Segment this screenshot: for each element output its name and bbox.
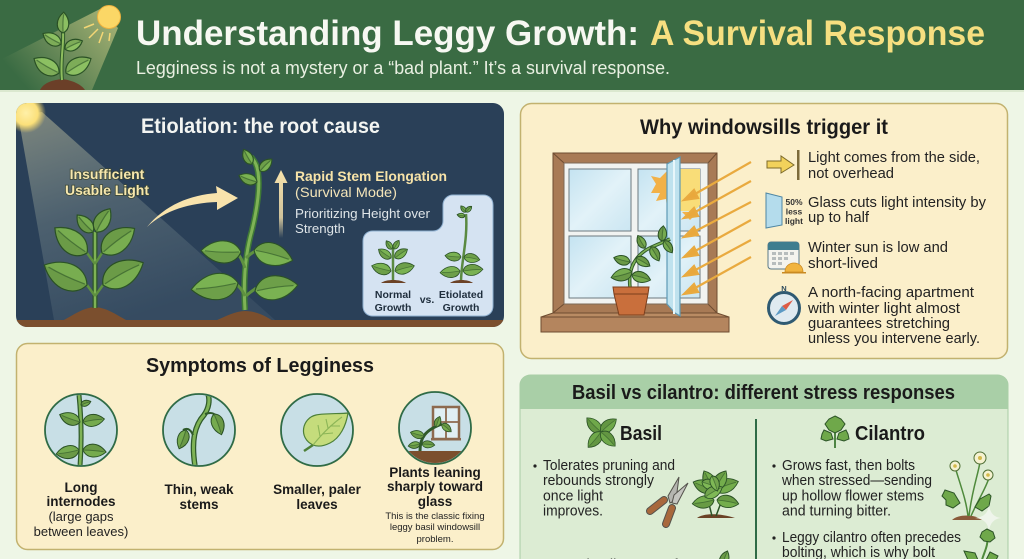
symptom: smaller leaves <box>273 394 362 512</box>
label: insufficient usable light <box>65 166 149 198</box>
inset labels: Growth <box>375 302 411 314</box>
light arrows <box>684 162 751 294</box>
symptom: plants leaning: glass <box>418 494 452 509</box>
symptom: plants leaning: problem. <box>417 534 453 545</box>
symptom: long internodes: internodes <box>46 494 116 509</box>
icon: cilantro leaf <box>821 416 849 448</box>
bullet: grows fast <box>772 458 932 520</box>
symptom: smaller leaves: Smaller, paler <box>273 482 362 497</box>
inset labels <box>375 289 483 314</box>
title: Understanding Leggy Growth: <box>136 14 639 53</box>
icon: plant in sunbeam <box>0 6 120 90</box>
mini plant: etiolated <box>440 205 483 283</box>
symptom: thin stems: Thin, weak <box>164 482 234 497</box>
bullet: tolerates pruning: Tolerates pruning and <box>543 458 675 474</box>
bullet: grows fast: up hollow flower stems <box>782 488 924 504</box>
potted plant <box>610 225 676 315</box>
plant: etiolated <box>190 147 299 310</box>
text: north facing: unless you intervene early. <box>808 330 980 347</box>
icon: basil bush <box>691 468 741 518</box>
column: cilantro <box>772 416 1001 559</box>
panel: etiolation <box>6 93 504 327</box>
icon: side arrow <box>767 150 800 180</box>
watermark star <box>975 505 1001 531</box>
panel: windowsills <box>520 104 1008 358</box>
text: winter sun: Winter sun is low and <box>808 239 948 256</box>
text: glass cuts light <box>808 194 986 226</box>
bullet: tolerates pruning: improves. <box>543 504 603 520</box>
label: insufficient usable light: Usable Light <box>65 182 149 198</box>
icon: bolting cilantro <box>942 452 993 520</box>
icon: calendar and low sun <box>768 242 806 274</box>
title: A Survival Response <box>650 14 985 53</box>
sun behind glass <box>680 169 700 211</box>
icon: glass 50%: 50% <box>785 197 803 207</box>
icon: cilantro sprig <box>964 529 998 559</box>
header banner <box>0 0 1024 92</box>
text: north facing: with winter light almost <box>807 300 961 317</box>
bullet: grows fast: and turning bitter. <box>782 504 891 520</box>
icon: basil leaves <box>583 414 620 451</box>
arrow: up <box>274 170 288 238</box>
text: light from side: not overhead <box>808 165 894 182</box>
illustration: window <box>541 153 751 332</box>
icon: pruning shears <box>650 477 688 524</box>
panel: symptoms <box>16 344 504 550</box>
bullet: leggy cilantro: Leggy cilantro often precedes <box>782 530 961 546</box>
text: north facing: guarantees stretching <box>808 315 950 332</box>
text: glass cuts light: up to half <box>808 209 870 226</box>
bullet: grows fast: when stressed—sending <box>781 473 932 489</box>
heading: Symptoms of Legginess <box>146 355 374 377</box>
text: rapid stem elongation: (Survival Mode) <box>295 184 397 200</box>
text: rapid stem elongation: Strength <box>295 221 345 236</box>
heading: Why windowsills trigger it <box>640 116 888 139</box>
mini plant: normal <box>370 239 416 283</box>
icon: glass 50%: light <box>785 216 803 226</box>
text: rapid stem elongation: Rapid Stem Elongation <box>295 168 447 184</box>
text: light from side: Light comes from the side, <box>808 149 980 166</box>
text: winter sun <box>808 239 948 272</box>
symptom: long internodes: between leaves) <box>34 524 128 539</box>
symptom: long internodes: (large gaps <box>48 509 114 524</box>
symptom: plants leaning: Plants leaning <box>389 465 481 480</box>
text: winter sun: short-lived <box>808 255 878 272</box>
text: glass cuts light: Glass cuts light intensity by <box>808 194 986 211</box>
text: light from side <box>808 149 980 182</box>
bullet: leggy cilantro <box>772 530 961 559</box>
heading: Etiolation: the root cause <box>141 115 380 138</box>
inset: normal vs etiolated <box>363 195 493 316</box>
symptom: plants leaning: sharply toward <box>387 479 483 494</box>
icon: small plant tip <box>718 549 731 559</box>
bullet: tolerates pruning: once light <box>543 488 603 504</box>
symptom: plants leaning <box>385 392 485 545</box>
symptom: plants leaning: leggy basil windowsill <box>390 522 480 533</box>
arrow: curved <box>147 186 238 227</box>
icon: glass 50% <box>766 193 803 228</box>
bullet: tolerates pruning <box>533 458 675 520</box>
panel: basil vs cilantro <box>520 375 1008 559</box>
symptom: smaller leaves: leaves <box>296 497 338 512</box>
light beam <box>18 112 275 320</box>
subtitle: Legginess is not a mystery or a “bad plant.” It’s a survival response. <box>136 58 670 78</box>
bullet: tolerates pruning: rebounds strongly <box>543 473 655 489</box>
symptom: plants leaning: This is the classic fixing <box>385 511 485 522</box>
symptom: thin stems: stems <box>179 497 219 512</box>
inset labels: Normal <box>375 289 411 301</box>
symptom: thin stems <box>163 394 235 512</box>
open glass pane <box>667 157 680 316</box>
plant: normal growth <box>38 205 149 308</box>
column: basil: Basil <box>620 423 662 445</box>
icon: compass: N <box>781 284 787 293</box>
icon: compass <box>768 284 800 324</box>
bullet: grows fast: Grows fast, then bolts <box>782 458 915 474</box>
heading: Basil vs cilantro: different stress responses <box>572 382 955 404</box>
icon: glass 50%: less <box>786 206 803 216</box>
text: rapid stem elongation: Prioritizing Height over <box>295 206 431 221</box>
text: north facing: A north-facing apartment <box>808 284 975 301</box>
column: cilantro: Cilantro <box>855 423 925 445</box>
inset labels: vs. <box>420 294 434 306</box>
text: rapid stem elongation <box>295 168 447 236</box>
symptom: long internodes: Long <box>64 480 98 495</box>
inset labels: Etiolated <box>439 289 483 301</box>
symptom: long internodes <box>34 394 128 539</box>
text: north facing <box>807 284 980 347</box>
inset labels: Growth <box>443 302 479 314</box>
column: basil <box>533 414 741 559</box>
label: insufficient usable light: Insufficient <box>70 166 145 182</box>
